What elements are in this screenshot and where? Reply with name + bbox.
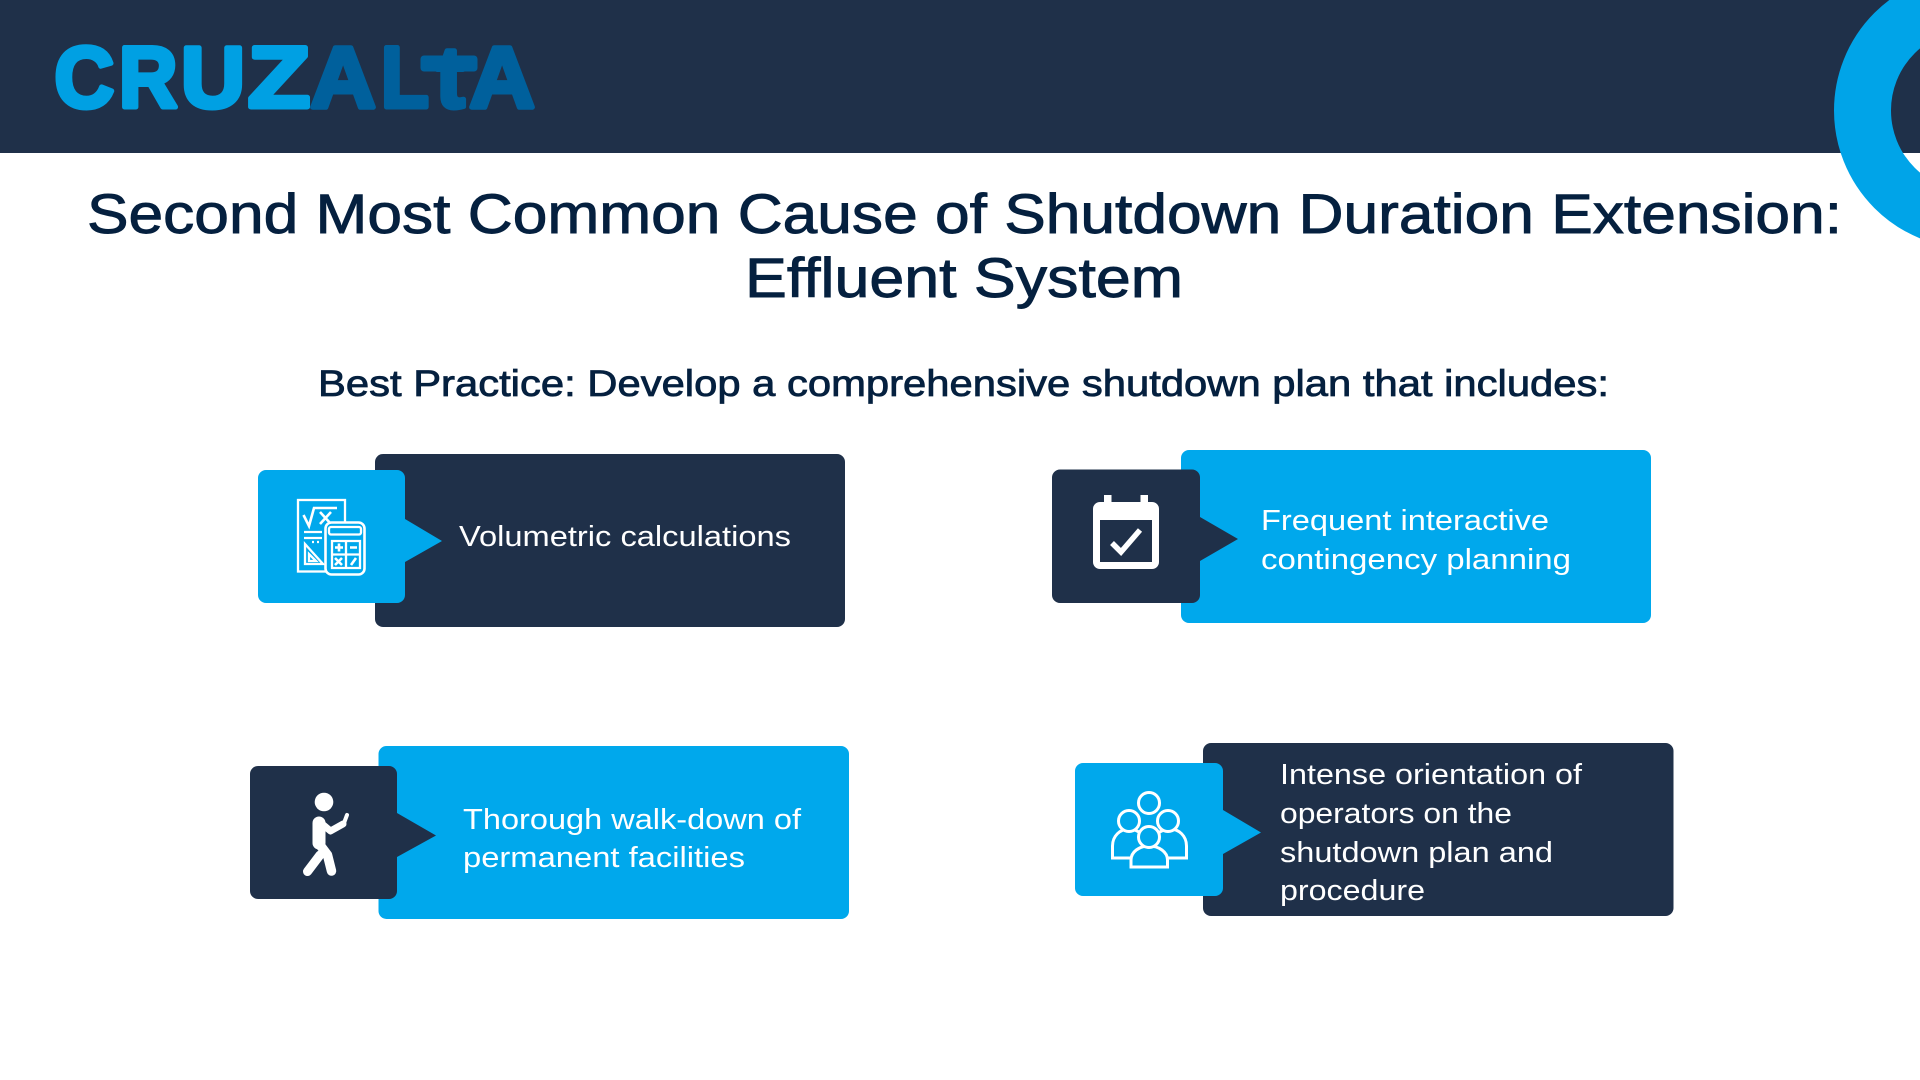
- icon: calendar with check: [1093, 495, 1159, 569]
- icon: document and calculator: [298, 500, 364, 574]
- label: contingency planning: [1261, 544, 1571, 576]
- label: permanent facilities: [463, 842, 745, 874]
- label: Frequent interactive: [1261, 505, 1549, 537]
- logo: CRUZALTA: C: [54, 29, 114, 125]
- card body: [1181, 450, 1651, 623]
- logo: CRUZALTA: [54, 29, 535, 126]
- logo: CRUZALTA: R: [119, 29, 177, 126]
- title: [87, 182, 1842, 309]
- label: [1280, 759, 1583, 907]
- logo: CRUZALTA: A: [310, 29, 376, 126]
- card body: [375, 454, 845, 627]
- label: Thorough walk-down of: [463, 804, 802, 836]
- label: [1261, 505, 1571, 576]
- label: shutdown plan and: [1280, 837, 1553, 869]
- logo: CRUZALTA: Z: [248, 29, 310, 125]
- logo: CRUZALTA: L: [381, 31, 429, 126]
- card: contingency planning: [1052, 450, 1651, 623]
- subtitle: best practice: Best Practice: Develop a comprehensive shutdown plan that includes:: [318, 363, 1609, 404]
- label: Volumetric calculations: [459, 521, 791, 553]
- card: volumetric calculations: [258, 454, 845, 627]
- label: [463, 804, 802, 874]
- icon: group of people: [1112, 792, 1186, 867]
- label: operators on the: [1280, 798, 1512, 830]
- title: Effluent System: [745, 246, 1183, 309]
- decorative ring: [1862, 1, 1920, 220]
- icon: walking person: [308, 793, 347, 872]
- icon tile with pointer: [258, 470, 442, 603]
- icon tile with pointer: [1052, 470, 1238, 603]
- label: Intense orientation of: [1280, 759, 1583, 791]
- logo: CRUZALTA: U: [181, 30, 245, 126]
- icon tile with pointer: [250, 766, 436, 899]
- card body: [1203, 743, 1674, 916]
- logo: CRUZALTA: t: [436, 30, 465, 126]
- title: Second Most Common Cause of Shutdown Duration Extension:: [87, 182, 1842, 245]
- card: operator orientation: [1075, 743, 1674, 916]
- card body: [378, 746, 849, 919]
- icon tile with pointer: [1075, 763, 1261, 896]
- label: procedure: [1280, 875, 1425, 907]
- header band: [0, 0, 1920, 153]
- logo: CRUZALTA: A: [470, 29, 535, 126]
- card: walk-down: [250, 746, 849, 919]
